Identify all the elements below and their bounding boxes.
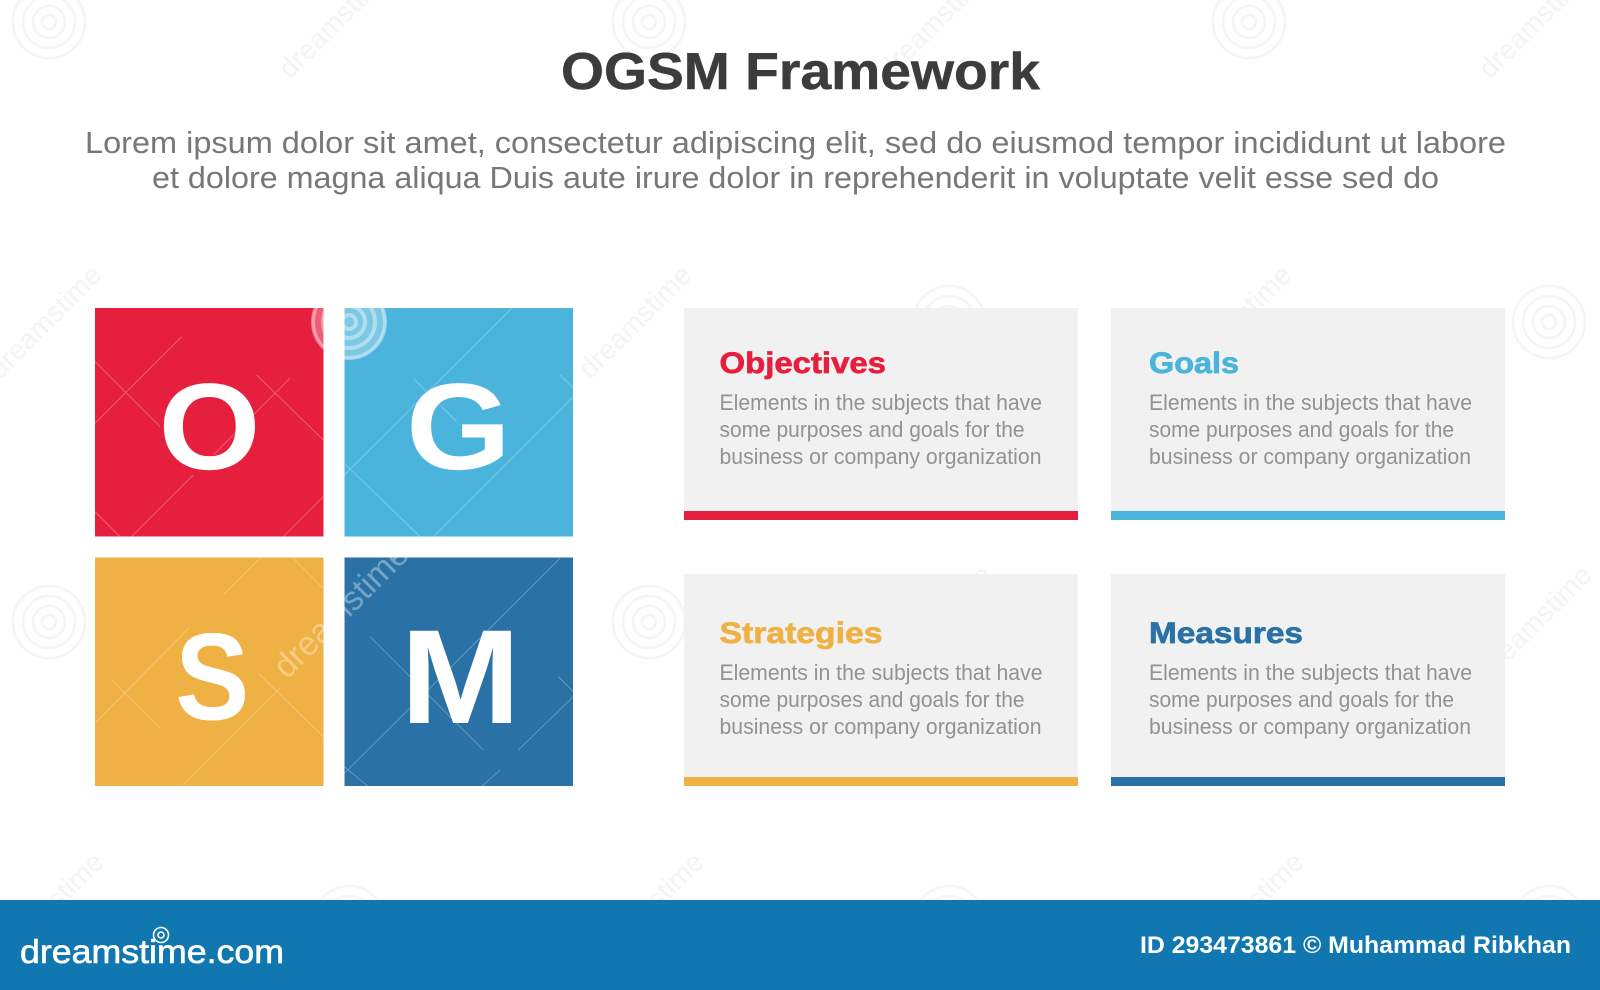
text: dreamstime bbox=[1172, 259, 1298, 384]
body text: Measures: Elements in the subjects that have bbox=[1149, 660, 1472, 685]
subtitle text block: et dolore magna aliqua Duis aute irure dolor in reprehenderit in voluptate velit esse sed do bbox=[152, 160, 1439, 195]
panel: Objectives bbox=[684, 308, 1078, 520]
letter G: G bbox=[406, 359, 511, 496]
square: M background bbox=[344, 558, 573, 786]
body text: Goals: some purposes and goals for the bbox=[1149, 417, 1454, 442]
subtitle text block bbox=[85, 125, 1506, 195]
text: dreamstime bbox=[572, 259, 698, 384]
heading: Goals: Goals bbox=[1149, 347, 1239, 380]
panel: Strategies bbox=[684, 574, 1078, 786]
panel: Measures bbox=[1111, 574, 1505, 786]
letter M: M bbox=[400, 603, 520, 752]
footer logo text: dreamstime.com bbox=[20, 933, 284, 970]
panel: Goals bbox=[1111, 308, 1505, 520]
body text: Measures bbox=[1149, 660, 1472, 739]
text: dreamstime bbox=[584, 846, 710, 971]
accent bar: Objectives bbox=[684, 511, 1078, 520]
body text: Measures: some purposes and goals for the bbox=[1149, 687, 1454, 712]
body text: Objectives: Elements in the subjects that have bbox=[720, 390, 1042, 415]
panel: OGSM letter grid: dreamstime bbox=[266, 535, 416, 686]
subtitle text block: Lorem ipsum dolor sit amet, consectetur adipiscing elit, sed do eiusmod tempor incididunt ut labore bbox=[85, 125, 1506, 160]
accent bar: Goals bbox=[1111, 511, 1505, 520]
body text: Objectives: business or company organization bbox=[720, 444, 1042, 469]
icon: logo spiral bbox=[154, 928, 168, 942]
footer credit text: ID 293473861 © Muhammad Ribkhan bbox=[1140, 932, 1571, 959]
letter O: O bbox=[158, 359, 260, 496]
body text: Goals bbox=[1149, 390, 1472, 469]
body text: Strategies: business or company organization bbox=[720, 714, 1042, 739]
body text: Objectives: some purposes and goals for the bbox=[720, 417, 1024, 442]
body text: Goals: business or company organization bbox=[1149, 444, 1471, 469]
square: G background bbox=[344, 308, 573, 536]
square: O background bbox=[95, 308, 324, 536]
body text: Goals: Elements in the subjects that have bbox=[1149, 390, 1472, 415]
heading: Strategies: Strategies bbox=[720, 617, 882, 650]
panel: OGSM letter grid bbox=[95, 285, 573, 787]
heading: Objectives: Objectives bbox=[720, 347, 886, 380]
body text: Measures: business or company organization bbox=[1149, 714, 1471, 739]
body text: Strategies bbox=[720, 660, 1042, 739]
footer banner bbox=[0, 900, 1600, 990]
text: dreamstime bbox=[1472, 559, 1598, 684]
letter S: S bbox=[175, 610, 249, 746]
text: dreamstime bbox=[872, 559, 998, 684]
square: S background bbox=[95, 558, 324, 786]
title: OGSM Framework bbox=[561, 43, 1040, 101]
body text: Strategies: some purposes and goals for the bbox=[720, 687, 1024, 712]
body text: Objectives bbox=[720, 390, 1042, 469]
text: dreamstime bbox=[1184, 846, 1310, 971]
accent bar: Measures bbox=[1111, 777, 1505, 786]
heading: Measures: Measures bbox=[1149, 617, 1303, 650]
accent bar: Strategies bbox=[684, 777, 1078, 786]
body text: Strategies: Elements in the subjects that have bbox=[720, 660, 1042, 685]
